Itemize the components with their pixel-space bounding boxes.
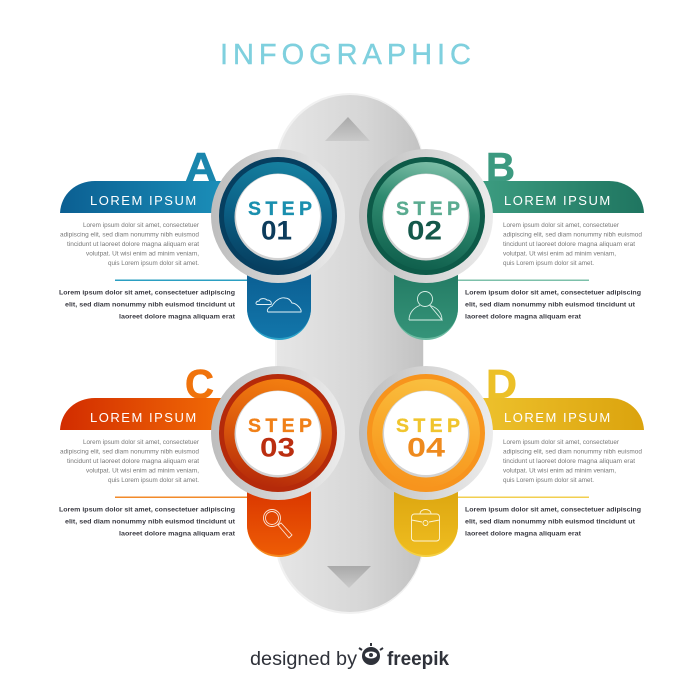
up arrow [325, 117, 370, 141]
description D: quis Lorem ipsum dolor sit amet. [503, 478, 594, 484]
bold text A: elit, sed diam nonummy nibh euismod tincidunt ut [65, 302, 236, 308]
icon: briefcase [412, 510, 440, 541]
bold text B: elit, sed diam nonummy nibh euismod tincidunt ut [465, 302, 636, 308]
panel B [359, 144, 644, 340]
bold text C: Lorem ipsum dolor sit amet, consectetuer adipiscing [59, 506, 235, 514]
description D: tincidunt ut laoreet dolore magna aliquam erat [503, 459, 635, 465]
tab A [247, 270, 311, 340]
central grey pill [275, 93, 424, 614]
bold text D: Lorem ipsum dolor sit amet, consectetuer adipiscing [465, 506, 641, 514]
step number: 03 [260, 432, 295, 462]
icon: freepik mascot [359, 643, 383, 665]
icon: person [409, 292, 442, 320]
bold text C [59, 506, 236, 538]
bold text C: laoreet dolore magna aliquam erat [119, 530, 236, 538]
description B: quis Lorem ipsum dolor sit amet. [503, 261, 594, 267]
description C [60, 440, 199, 484]
footer credit: designed by [250, 649, 358, 670]
description A: volutpat. Ut wisi enim ad minim veniam, [86, 252, 199, 258]
banner D [480, 398, 644, 430]
banner heading D: LOREM IPSUM [504, 410, 611, 425]
bold text A: laoreet dolore magna aliquam erat [119, 314, 236, 320]
panel D [359, 361, 644, 557]
badge D [359, 366, 493, 500]
description D: volutpat. Ut wisi enim ad minim veniam, [503, 468, 616, 474]
banner B [480, 181, 644, 213]
description A: adipiscing elit, sed diam nonummy nibh euismod [60, 232, 199, 238]
down arrow [327, 566, 371, 588]
step number: 04 [407, 432, 445, 462]
tab B [394, 270, 458, 340]
description B [503, 223, 642, 267]
description A: quis Lorem ipsum dolor sit amet. [108, 261, 199, 267]
banner heading C: LOREM IPSUM [90, 410, 197, 425]
bold text B: laoreet dolore magna aliquam erat [465, 314, 582, 320]
letter B: B [486, 144, 515, 190]
divider A [115, 280, 250, 281]
description A [60, 223, 199, 267]
panel A [59, 144, 345, 340]
bold text B [465, 290, 641, 320]
divider D [455, 496, 589, 498]
banner heading A: LOREM IPSUM [90, 193, 197, 208]
bold text D [465, 506, 641, 538]
bold text D: laoreet dolore magna aliquam erat [465, 530, 582, 538]
divider B [455, 280, 589, 281]
panel C [59, 361, 345, 557]
description B: adipiscing elit, sed diam nonummy nibh euismod [503, 232, 642, 238]
description B: volutpat. Ut wisi enim ad minim veniam, [503, 252, 616, 258]
banner A [60, 181, 225, 213]
bold text A: Lorem ipsum dolor sit amet, consectetuer adipiscing [59, 290, 235, 296]
icon: clouds [256, 298, 301, 312]
description A: tincidunt ut laoreet dolore magna aliquam erat [67, 242, 199, 248]
banner C [60, 398, 225, 430]
badge B [359, 149, 493, 283]
description C: tincidunt ut laoreet dolore magna aliquam erat [67, 459, 199, 465]
description C: adipiscing elit, sed diam nonummy nibh euismod [60, 450, 199, 456]
letter A: A [185, 144, 217, 190]
description C: quis Lorem ipsum dolor sit amet. [108, 478, 199, 484]
description C: Lorem ipsum dolor sit amet, consectetuer [83, 440, 199, 446]
step label: STEP [396, 415, 460, 437]
bold text D: elit, sed diam nonummy nibh euismod tincidunt ut [465, 518, 636, 526]
description D [503, 440, 642, 484]
tab C [247, 487, 311, 557]
letter C: C [185, 361, 214, 407]
description C: volutpat. Ut wisi enim ad minim veniam, [86, 468, 199, 474]
description B: tincidunt ut laoreet dolore magna aliquam erat [503, 242, 635, 248]
tab D [394, 487, 458, 557]
step number: 02 [407, 216, 442, 246]
badge C [211, 366, 345, 500]
step label: STEP [396, 198, 460, 220]
banner heading B: LOREM IPSUM [504, 193, 611, 208]
letter D: D [486, 361, 517, 407]
description B: Lorem ipsum dolor sit amet, consectetuer [503, 223, 619, 229]
divider C [115, 496, 250, 498]
step number: 01 [261, 216, 292, 246]
footer credit [250, 643, 449, 670]
badge A [211, 149, 345, 283]
bold text B: Lorem ipsum dolor sit amet, consectetuer adipiscing [465, 290, 641, 296]
step label: STEP [248, 415, 312, 437]
footer credit: freepik [387, 649, 449, 670]
title: INFOGRAPHIC [220, 39, 471, 71]
bold text A [59, 290, 236, 320]
icon: magnifier [264, 510, 292, 538]
description D: adipiscing elit, sed diam nonummy nibh euismod [503, 450, 642, 456]
description D: Lorem ipsum dolor sit amet, consectetuer [503, 440, 619, 446]
step label: STEP [248, 198, 312, 220]
bold text C: elit, sed diam nonummy nibh euismod tincidunt ut [65, 518, 236, 526]
description A: Lorem ipsum dolor sit amet, consectetuer [83, 223, 199, 229]
